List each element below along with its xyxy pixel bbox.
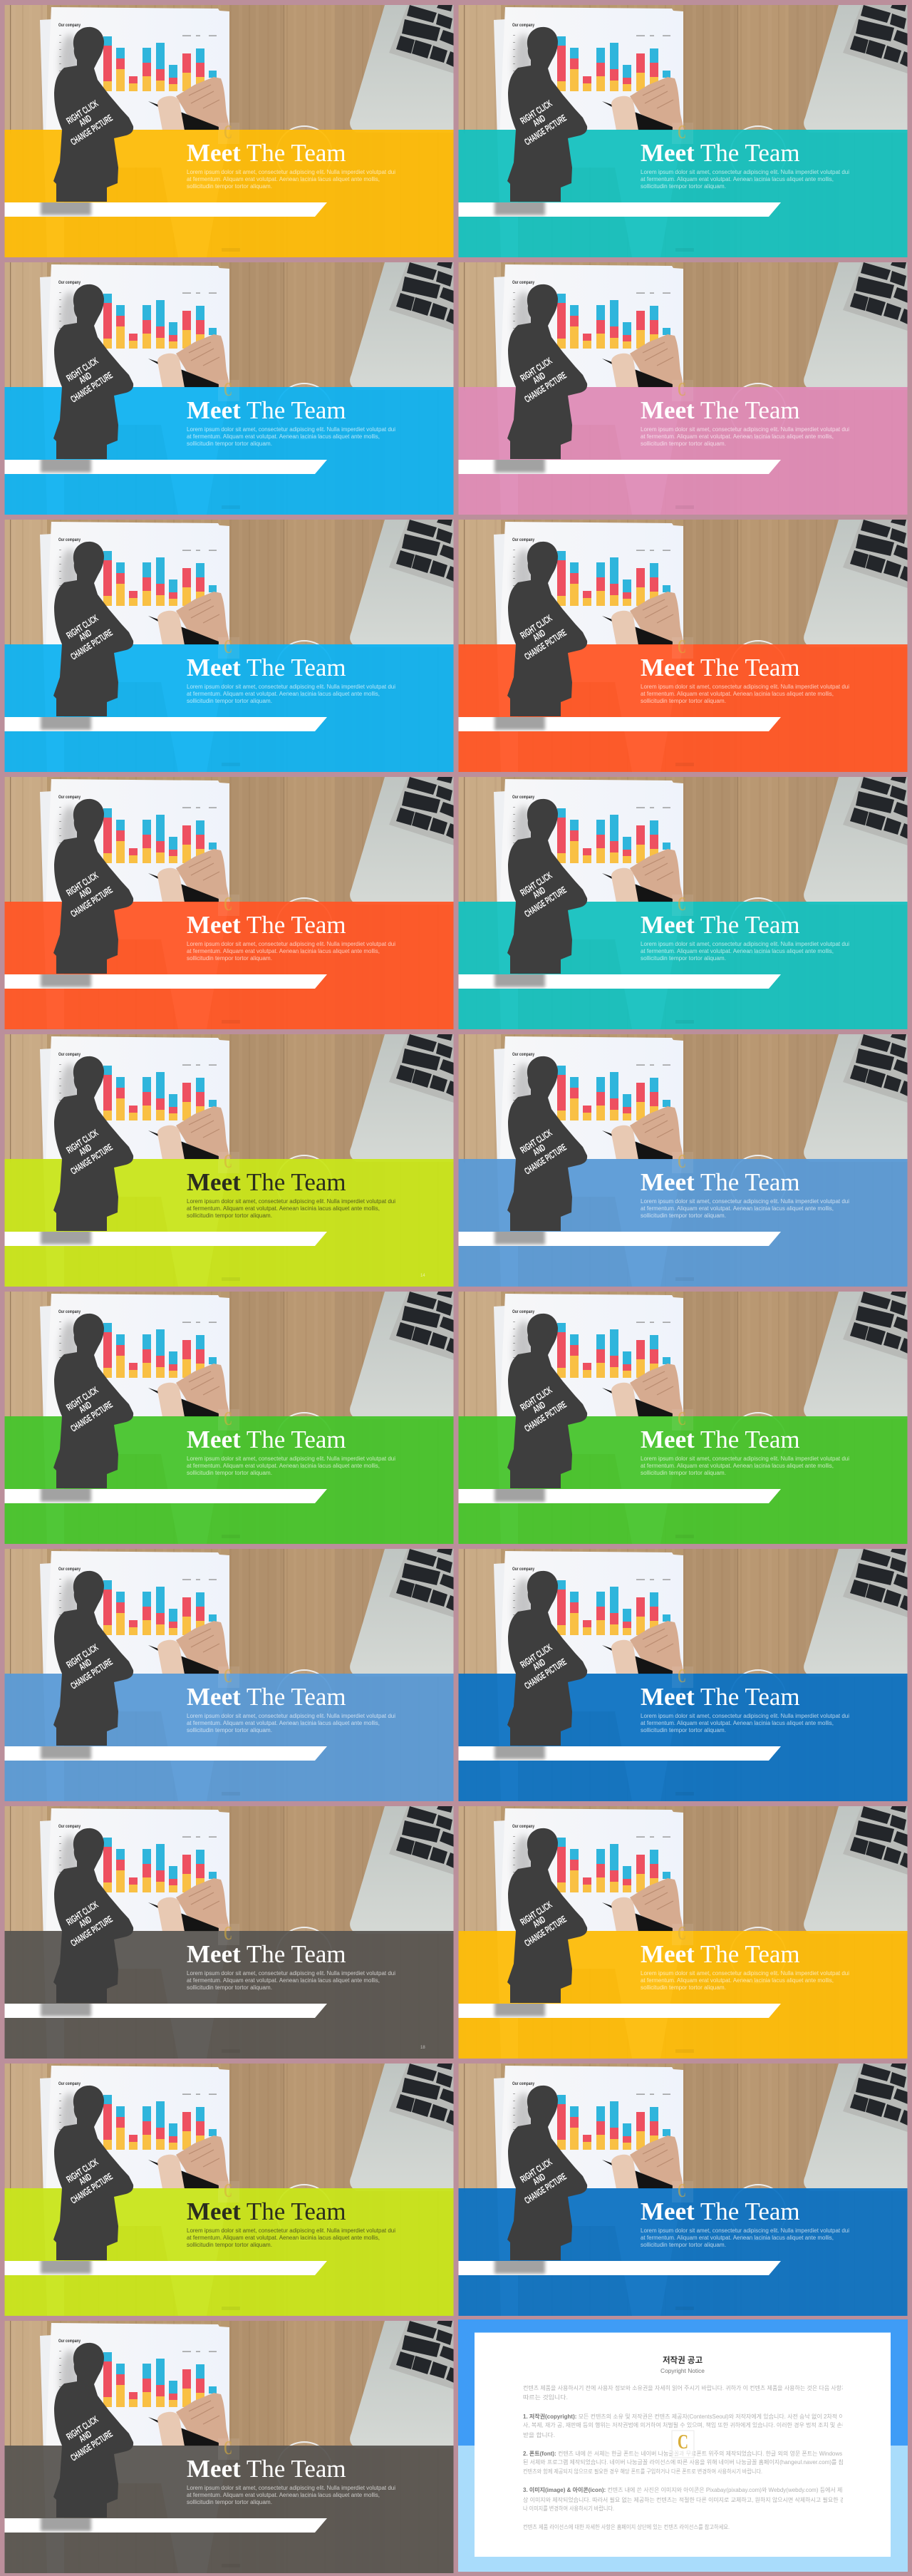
silhouette label: CHANGE PICTURE: [522, 1399, 569, 1434]
silhouette: [41, 799, 240, 1024]
silhouette label: RIGHT CLICK: [518, 612, 554, 641]
body text: Lorem ipsum dolor sit amet, consectetur adipiscing elit. Nulla imperdiet volutpat dui: [187, 1198, 395, 1205]
silhouette label: RIGHT CLICK: [64, 1899, 100, 1927]
body text: at fermentum. Aliquam erat volutpat. Aenean lacinia lacus aliquet ante mollis,: [187, 176, 380, 182]
photo: [458, 5, 908, 257]
silhouette: [494, 284, 694, 509]
colour band: [458, 1159, 908, 1287]
body text: [187, 684, 395, 704]
title: Meet The Team: [641, 1426, 800, 1453]
body text: Lorem ipsum dolor sit amet, consectetur adipiscing elit. Nulla imperdiet volutpat dui: [641, 1198, 849, 1205]
silhouette label: [64, 1899, 115, 1949]
body text: sollicitudin tempor tortor aliquam.: [641, 1470, 726, 1476]
slide 15: dark grey: [4, 1806, 453, 2059]
silhouette label: AND: [77, 2171, 93, 2187]
white bar: [458, 717, 781, 731]
body text: sollicitudin tempor tortor aliquam.: [641, 955, 726, 962]
silhouette label: RIGHT CLICK: [64, 870, 100, 898]
photo: [4, 1292, 455, 1544]
body text: at fermentum. Aliquam erat volutpat. Aenean lacinia lacus aliquet ante mollis,: [187, 1720, 380, 1726]
title: Meet The Team: [641, 654, 800, 681]
silhouette label: CHANGE PICTURE: [522, 370, 569, 405]
silhouette label: RIGHT CLICK: [518, 1899, 554, 1927]
colour band: [4, 1931, 455, 2059]
silhouette label: RIGHT CLICK: [518, 355, 554, 383]
body text: sollicitudin tempor tortor aliquam.: [187, 1212, 272, 1219]
white bar: [458, 974, 781, 989]
photo: [458, 262, 908, 515]
white bar: [458, 2004, 781, 2018]
body text: at fermentum. Aliquam erat volutpat. Aenean lacinia lacus aliquet ante mollis,: [187, 2235, 380, 2241]
body text: sollicitudin tempor tortor aliquam.: [641, 441, 726, 447]
silhouette label: RIGHT CLICK: [518, 1642, 554, 1670]
body text: sollicitudin tempor tortor aliquam.: [641, 183, 726, 190]
body text: [187, 2485, 395, 2505]
body text: sollicitudin tempor tortor aliquam.: [187, 955, 272, 962]
photo: [4, 520, 455, 772]
colour band: [458, 1931, 908, 2059]
body text: at fermentum. Aliquam erat volutpat. Aenean lacinia lacus aliquet ante mollis,: [187, 433, 380, 440]
notice background top: [458, 2319, 908, 2446]
slide 20: copyright notice: [458, 2319, 912, 2572]
body text: sollicitudin tempor tortor aliquam.: [187, 183, 272, 190]
title: Meet The Team: [641, 1940, 800, 1968]
body text: Lorem ipsum dolor sit amet, consectetur adipiscing elit. Nulla imperdiet volutpat dui: [187, 2227, 395, 2234]
silhouette label: [518, 2156, 569, 2206]
silhouette label: [518, 355, 569, 405]
silhouette label: CHANGE PICTURE: [68, 1399, 115, 1434]
silhouette: [494, 799, 694, 1024]
title: Meet The Team: [187, 1168, 346, 1196]
title: Meet The Team: [187, 396, 346, 424]
notice background bottom: [458, 2446, 908, 2572]
body text: at fermentum. Aliquam erat volutpat. Aenean lacinia lacus aliquet ante mollis,: [641, 1205, 834, 1212]
silhouette: [41, 284, 240, 509]
body text: [187, 1713, 395, 1733]
white bar: [458, 460, 781, 474]
silhouette label: CHANGE PICTURE: [522, 1914, 569, 1949]
colour band: [458, 387, 908, 515]
colour band: [458, 2188, 908, 2316]
silhouette label: AND: [77, 2428, 93, 2444]
body text: at fermentum. Aliquam erat volutpat. Aenean lacinia lacus aliquet ante mollis,: [641, 433, 834, 440]
silhouette label: AND: [531, 113, 547, 128]
title: Meet The Team: [187, 1426, 346, 1453]
body text: [187, 1456, 395, 1476]
colour band: [4, 902, 455, 1029]
body text: at fermentum. Aliquam erat volutpat. Aenean lacinia lacus aliquet ante mollis,: [187, 1463, 380, 1469]
silhouette: [494, 2086, 694, 2310]
white bar: [458, 202, 781, 217]
silhouette label: [64, 1384, 115, 1434]
body text: sollicitudin tempor tortor aliquam.: [641, 698, 726, 704]
white bar: [4, 460, 327, 474]
silhouette label: AND: [531, 2171, 547, 2187]
white bar: [4, 202, 327, 217]
slide 4: pink: [459, 262, 908, 515]
title: Meet The Team: [187, 1940, 346, 1968]
silhouette label: [518, 612, 569, 662]
silhouette: [41, 2086, 240, 2310]
body text: at fermentum. Aliquam erat volutpat. Aenean lacinia lacus aliquet ante mollis,: [187, 1205, 380, 1212]
notice body text: 나 이미지를 변경하여 사용하시기 바랍니다.: [523, 2505, 614, 2512]
silhouette label: AND: [77, 1914, 93, 1930]
silhouette: [41, 1571, 240, 1796]
notice body text: 컨텐츠와 함께 제공되지 않으므로 필요한 경우 해당 폰트를 구입하거나 다른 폰트로 변경하여 사용하시기 바랍니다.: [523, 2468, 762, 2475]
white bar: [4, 2261, 327, 2275]
silhouette label: RIGHT CLICK: [64, 612, 100, 641]
colour band: [458, 130, 908, 257]
silhouette label: AND: [77, 370, 93, 386]
silhouette: [41, 27, 240, 252]
body text: Lorem ipsum dolor sit amet, consectetur adipiscing elit. Nulla imperdiet volutpat dui: [187, 1970, 395, 1977]
silhouette: [41, 1828, 240, 2053]
silhouette: [41, 2343, 240, 2567]
body text: Lorem ipsum dolor sit amet, consectetur adipiscing elit. Nulla imperdiet volutpat dui: [641, 2227, 849, 2234]
title: Meet The Team: [641, 139, 800, 167]
silhouette label: AND: [531, 1657, 547, 1672]
title: Meet The Team: [641, 396, 800, 424]
notice heading: 저작권 공고: [663, 2355, 703, 2365]
silhouette label: RIGHT CLICK: [64, 1384, 100, 1413]
white bar: [4, 2518, 327, 2533]
white bar: [4, 1746, 327, 1761]
slide 7: orange: [4, 777, 453, 1029]
body text: at fermentum. Aliquam erat volutpat. Aenean lacinia lacus aliquet ante mollis,: [641, 691, 834, 697]
silhouette label: CHANGE PICTURE: [522, 1142, 569, 1177]
silhouette label: [518, 870, 569, 919]
silhouette label: CHANGE PICTURE: [522, 885, 569, 919]
body text: [187, 2227, 395, 2248]
silhouette label: RIGHT CLICK: [64, 1127, 100, 1155]
body text: [641, 684, 849, 704]
title: Meet The Team: [641, 911, 800, 939]
slide 16: yellow: [459, 1806, 908, 2059]
photo: [458, 2064, 908, 2316]
body text: at fermentum. Aliquam erat volutpat. Aenean lacinia lacus aliquet ante mollis,: [187, 948, 380, 954]
silhouette label: [64, 2156, 115, 2206]
body text: [641, 1713, 849, 1733]
title: Meet The Team: [641, 1683, 800, 1711]
body text: [641, 1456, 849, 1476]
title: Meet The Team: [187, 2198, 346, 2225]
silhouette label: AND: [531, 1399, 547, 1415]
title: Meet The Team: [187, 139, 346, 167]
photo: [4, 1806, 455, 2059]
silhouette: [494, 1056, 694, 1281]
photo: [458, 777, 908, 1029]
body text: [641, 426, 849, 447]
photo: [458, 520, 908, 772]
silhouette label: RIGHT CLICK: [64, 98, 100, 126]
watermark badge: [672, 2431, 694, 2458]
white bar: [4, 1489, 327, 1503]
photo: [4, 777, 455, 1029]
body text: sollicitudin tempor tortor aliquam.: [641, 1727, 726, 1733]
body text: at fermentum. Aliquam erat volutpat. Aenean lacinia lacus aliquet ante mollis,: [641, 176, 834, 182]
silhouette label: CHANGE PICTURE: [68, 370, 115, 405]
photo: [4, 2321, 455, 2573]
body text: sollicitudin tempor tortor aliquam.: [187, 1470, 272, 1476]
body text: sollicitudin tempor tortor aliquam.: [187, 1727, 272, 1733]
colour band: [458, 1674, 908, 1801]
photo: [458, 1806, 908, 2059]
body text: sollicitudin tempor tortor aliquam.: [187, 2499, 272, 2505]
slide 2: teal: [459, 5, 908, 257]
silhouette label: [518, 1127, 569, 1177]
colour band: [4, 2188, 455, 2316]
slide 12: green: [459, 1292, 908, 1544]
silhouette label: RIGHT CLICK: [64, 2156, 100, 2185]
slide 10: steel blue: [459, 1034, 908, 1287]
body text: Lorem ipsum dolor sit amet, consectetur adipiscing elit. Nulla imperdiet volutpat dui: [187, 1713, 395, 1719]
body text: Lorem ipsum dolor sit amet, consectetur adipiscing elit. Nulla imperdiet volutpat dui: [641, 941, 849, 947]
silhouette label: RIGHT CLICK: [518, 98, 554, 126]
white notice panel: [475, 2332, 891, 2557]
white bar: [4, 717, 327, 731]
silhouette label: AND: [77, 1399, 93, 1415]
body text: [187, 941, 395, 962]
silhouette label: RIGHT CLICK: [64, 355, 100, 383]
silhouette: [41, 1314, 240, 1538]
silhouette label: RIGHT CLICK: [518, 1127, 554, 1155]
title: Meet The Team: [187, 1683, 346, 1711]
silhouette label: [64, 612, 115, 662]
notice body text: 컨텐츠 제품 라이선스에 대한 자세한 사항은 홈페이지 상단에 있는 컨텐츠 라이선스를 참고하세요.: [523, 2523, 730, 2530]
body text: sollicitudin tempor tortor aliquam.: [187, 698, 272, 704]
silhouette label: RIGHT CLICK: [518, 1384, 554, 1413]
white bar: [458, 1746, 781, 1761]
body text: at fermentum. Aliquam erat volutpat. Aenean lacinia lacus aliquet ante mollis,: [641, 1720, 834, 1726]
title: Meet The Team: [641, 2198, 800, 2225]
slide 1: yellow: [4, 5, 453, 257]
silhouette label: CHANGE PICTURE: [522, 2171, 569, 2206]
body text: at fermentum. Aliquam erat volutpat. Aenean lacinia lacus aliquet ante mollis,: [641, 1463, 834, 1469]
slide 14: dark blue: [459, 1549, 908, 1801]
slide 6: orange: [459, 520, 908, 772]
body text: [641, 2227, 849, 2248]
photo: [458, 1292, 908, 1544]
silhouette label: [518, 1642, 569, 1691]
body text: at fermentum. Aliquam erat volutpat. Aenean lacinia lacus aliquet ante mollis,: [187, 1977, 380, 1984]
body text: Lorem ipsum dolor sit amet, consectetur adipiscing elit. Nulla imperdiet volutpat dui: [187, 941, 395, 947]
silhouette label: CHANGE PICTURE: [68, 1142, 115, 1177]
silhouette label: [518, 1899, 569, 1949]
silhouette label: RIGHT CLICK: [518, 870, 554, 898]
silhouette label: [64, 1642, 115, 1691]
slide 8: teal: [459, 777, 908, 1029]
silhouette label: AND: [531, 1142, 547, 1158]
silhouette label: CHANGE PICTURE: [68, 627, 115, 662]
silhouette label: AND: [77, 627, 93, 643]
slide 18: dark blue: [459, 2064, 908, 2316]
silhouette label: RIGHT CLICK: [64, 1642, 100, 1670]
white bar: [4, 2004, 327, 2018]
body text: at fermentum. Aliquam erat volutpat. Aenean lacinia lacus aliquet ante mollis,: [187, 2492, 380, 2498]
slide 19: dark grey: [4, 2321, 453, 2573]
silhouette label: [518, 98, 569, 148]
silhouette label: CHANGE PICTURE: [522, 1657, 569, 1691]
silhouette label: AND: [77, 1657, 93, 1672]
body text: Lorem ipsum dolor sit amet, consectetur adipiscing elit. Nulla imperdiet volutpat dui: [187, 1456, 395, 1462]
title: Meet The Team: [187, 911, 346, 939]
body text: [641, 1970, 849, 1991]
body text: at fermentum. Aliquam erat volutpat. Aenean lacinia lacus aliquet ante mollis,: [187, 691, 380, 697]
colour band: [458, 1416, 908, 1544]
silhouette label: AND: [531, 1914, 547, 1930]
silhouette label: [518, 1384, 569, 1434]
page number: 18: [420, 2046, 425, 2050]
silhouette label: CHANGE PICTURE: [68, 1914, 115, 1949]
silhouette: [494, 27, 694, 252]
white bar: [4, 1232, 327, 1246]
slide 17: lime: [4, 2064, 453, 2316]
white bar: [4, 974, 327, 989]
body text: Lorem ipsum dolor sit amet, consectetur adipiscing elit. Nulla imperdiet volutpat dui: [641, 1713, 849, 1719]
photo: [4, 1034, 455, 1287]
silhouette: [494, 1314, 694, 1538]
slide 11: green: [4, 1292, 453, 1544]
silhouette label: RIGHT CLICK: [518, 2156, 554, 2185]
silhouette label: RIGHT CLICK: [64, 2413, 100, 2442]
photo: [4, 262, 455, 515]
body text: Lorem ipsum dolor sit amet, consectetur adipiscing elit. Nulla imperdiet volutpat dui: [641, 1970, 849, 1977]
body text: [187, 169, 395, 190]
silhouette label: [64, 98, 115, 148]
silhouette label: CHANGE PICTURE: [68, 2428, 115, 2463]
white bar: [458, 1232, 781, 1246]
silhouette label: AND: [77, 1142, 93, 1158]
body text: [187, 1970, 395, 1991]
body text: sollicitudin tempor tortor aliquam.: [641, 1984, 726, 1991]
silhouette: [41, 1056, 240, 1281]
photo: [4, 1549, 455, 1801]
body text: Lorem ipsum dolor sit amet, consectetur adipiscing elit. Nulla imperdiet volutpat dui: [641, 1456, 849, 1462]
body text: [641, 169, 849, 190]
colour band: [4, 1416, 455, 1544]
white bar: [458, 2261, 781, 2275]
white bar: [458, 1489, 781, 1503]
silhouette label: [64, 1127, 115, 1177]
page number: 14: [420, 1274, 425, 1278]
silhouette: [41, 542, 240, 766]
body text: Lorem ipsum dolor sit amet, consectetur adipiscing elit. Nulla imperdiet volutpat dui: [187, 169, 395, 175]
slide 5: blue: [4, 520, 453, 772]
slide 3: blue: [4, 262, 453, 515]
body text: Lorem ipsum dolor sit amet, consectetur adipiscing elit. Nulla imperdiet volutpat dui: [187, 2485, 395, 2491]
body text: Lorem ipsum dolor sit amet, consectetur adipiscing elit. Nulla imperdiet volutpat dui: [641, 169, 849, 175]
body text: at fermentum. Aliquam erat volutpat. Aenean lacinia lacus aliquet ante mollis,: [641, 2235, 834, 2241]
body text: Lorem ipsum dolor sit amet, consectetur adipiscing elit. Nulla imperdiet volutpat dui: [641, 426, 849, 433]
colour band: [4, 644, 455, 772]
silhouette label: [64, 2413, 115, 2463]
silhouette label: AND: [77, 885, 93, 900]
watermark badge: C: [678, 2431, 688, 2453]
silhouette label: CHANGE PICTURE: [68, 2171, 115, 2206]
slide 13: steel blue: [4, 1549, 453, 1801]
body text: Lorem ipsum dolor sit amet, consectetur adipiscing elit. Nulla imperdiet volutpat dui: [641, 684, 849, 690]
silhouette label: AND: [77, 113, 93, 128]
colour band: [4, 2446, 455, 2573]
body text: [187, 1198, 395, 1219]
silhouette label: CHANGE PICTURE: [68, 113, 115, 148]
body text: sollicitudin tempor tortor aliquam.: [187, 2242, 272, 2248]
title: Meet The Team: [187, 654, 346, 681]
silhouette: [494, 1571, 694, 1796]
body text: at fermentum. Aliquam erat volutpat. Aenean lacinia lacus aliquet ante mollis,: [641, 1977, 834, 1984]
body text: [641, 941, 849, 962]
colour band: [4, 387, 455, 515]
notice body text: 따르는 것입니다.: [523, 2394, 568, 2401]
body text: Lorem ipsum dolor sit amet, consectetur adipiscing elit. Nulla imperdiet volutpat dui: [187, 684, 395, 690]
silhouette: [494, 542, 694, 766]
silhouette label: CHANGE PICTURE: [68, 1657, 115, 1691]
slide 9: lime: [4, 1034, 453, 1287]
silhouette: [494, 1828, 694, 2053]
silhouette label: AND: [531, 627, 547, 643]
body text: Lorem ipsum dolor sit amet, consectetur adipiscing elit. Nulla imperdiet volutpat dui: [187, 426, 395, 433]
colour band: [4, 1159, 455, 1287]
body text: sollicitudin tempor tortor aliquam.: [641, 1212, 726, 1219]
photo: [4, 5, 455, 257]
photo: [4, 2064, 455, 2316]
silhouette label: [64, 870, 115, 919]
silhouette label: AND: [531, 885, 547, 900]
silhouette label: CHANGE PICTURE: [522, 113, 569, 148]
body text: sollicitudin tempor tortor aliquam.: [187, 441, 272, 447]
notice subheading: Copyright Notice: [660, 2367, 705, 2374]
body text: [641, 1198, 849, 1219]
silhouette label: CHANGE PICTURE: [522, 627, 569, 662]
body text: sollicitudin tempor tortor aliquam.: [187, 1984, 272, 1991]
notice body text: [523, 2384, 912, 2530]
colour band: [458, 644, 908, 772]
photo: [458, 1034, 908, 1287]
photo: [458, 1549, 908, 1801]
title: Meet The Team: [187, 2455, 346, 2483]
notice body text: 받을 합니다.: [523, 2431, 555, 2438]
colour band: [458, 902, 908, 1029]
body text: sollicitudin tempor tortor aliquam.: [641, 2242, 726, 2248]
colour band: [4, 1674, 455, 1801]
silhouette label: CHANGE PICTURE: [68, 885, 115, 919]
colour band: [4, 130, 455, 257]
silhouette label: AND: [531, 370, 547, 386]
body text: [187, 426, 395, 447]
title: Meet The Team: [641, 1168, 800, 1196]
body text: at fermentum. Aliquam erat volutpat. Aenean lacinia lacus aliquet ante mollis,: [641, 948, 834, 954]
silhouette label: [64, 355, 115, 405]
